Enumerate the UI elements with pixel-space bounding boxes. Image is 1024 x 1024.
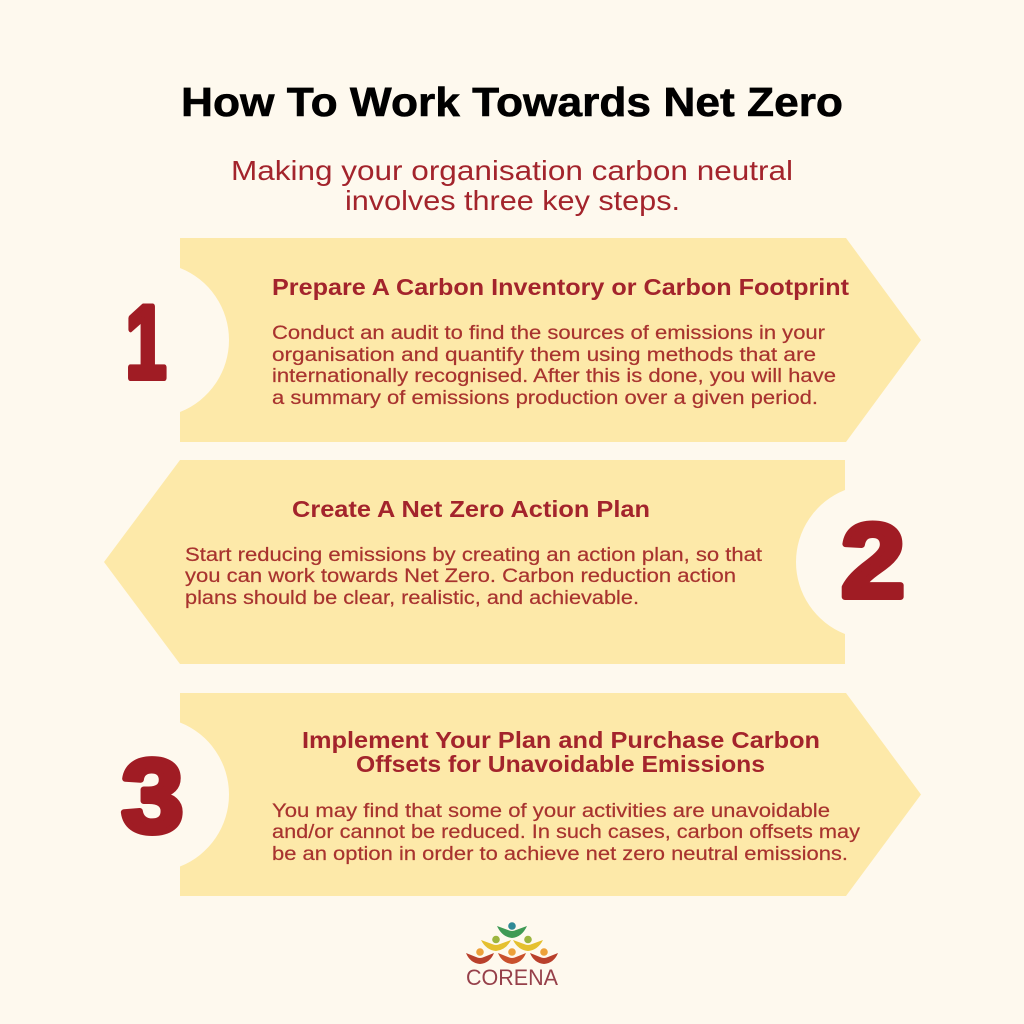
text: step 1 body: internationally recognised. After this is done, you will have [272, 366, 836, 387]
heading: step 3: Implement Your Plan and Purchase Carbon [302, 727, 820, 753]
icon: top figure [497, 922, 527, 938]
text: step 2 body: Start reducing emissions by creating an action plan, so that [185, 545, 763, 566]
logo: CORENA [466, 922, 558, 990]
text: step 3 body [272, 801, 861, 865]
panel: step 2 [104, 460, 905, 664]
text: step 1 body: organisation and quantify them using methods that are [272, 345, 816, 366]
number 1: 1 [126, 285, 166, 401]
arrow shape: step 1 [180, 238, 921, 442]
number 3: 3 [122, 739, 184, 855]
heading: step 2: Create A Net Zero Action Plan [292, 496, 650, 522]
subtitle [231, 155, 793, 216]
icon: bottom figures [466, 948, 558, 964]
panel: step 3 [122, 693, 921, 896]
heading: step 3: Offsets for Unavoidable Emissions [356, 751, 765, 777]
subtitle: Making your organisation carbon neutral [231, 155, 793, 186]
text: step 2 body: you can work towards Net Zero. Carbon reduction action [185, 566, 736, 587]
number 2: 2 [841, 503, 905, 620]
heading: step 3 [302, 727, 820, 777]
text: step 2 body: plans should be clear, realistic, and achievable. [185, 588, 639, 609]
text: step 1 body: Conduct an audit to find the sources of emissions in your [272, 323, 826, 344]
title: How To Work Towards Net Zero [181, 79, 843, 125]
subtitle: involves three key steps. [345, 185, 680, 216]
arrow shape: step 2 [104, 460, 845, 664]
arrow shape: step 3 [180, 693, 921, 896]
panel: step 1 [126, 238, 921, 442]
text: step 1 body [272, 323, 836, 409]
text: step 2 body [185, 545, 763, 609]
icon: middle figures [481, 936, 543, 951]
logo wordmark: CORENA [466, 965, 558, 990]
text: step 3 body: and/or cannot be reduced. In such cases, carbon offsets may [272, 822, 861, 843]
text: step 1 body: a summary of emissions production over a given period. [272, 388, 818, 409]
text: step 3 body: You may find that some of your activities are unavoidable [272, 801, 830, 822]
heading: step 1: Prepare A Carbon Inventory or Carbon Footprint [272, 274, 849, 300]
text: step 3 body: be an option in order to achieve net zero neutral emissions. [272, 844, 848, 865]
